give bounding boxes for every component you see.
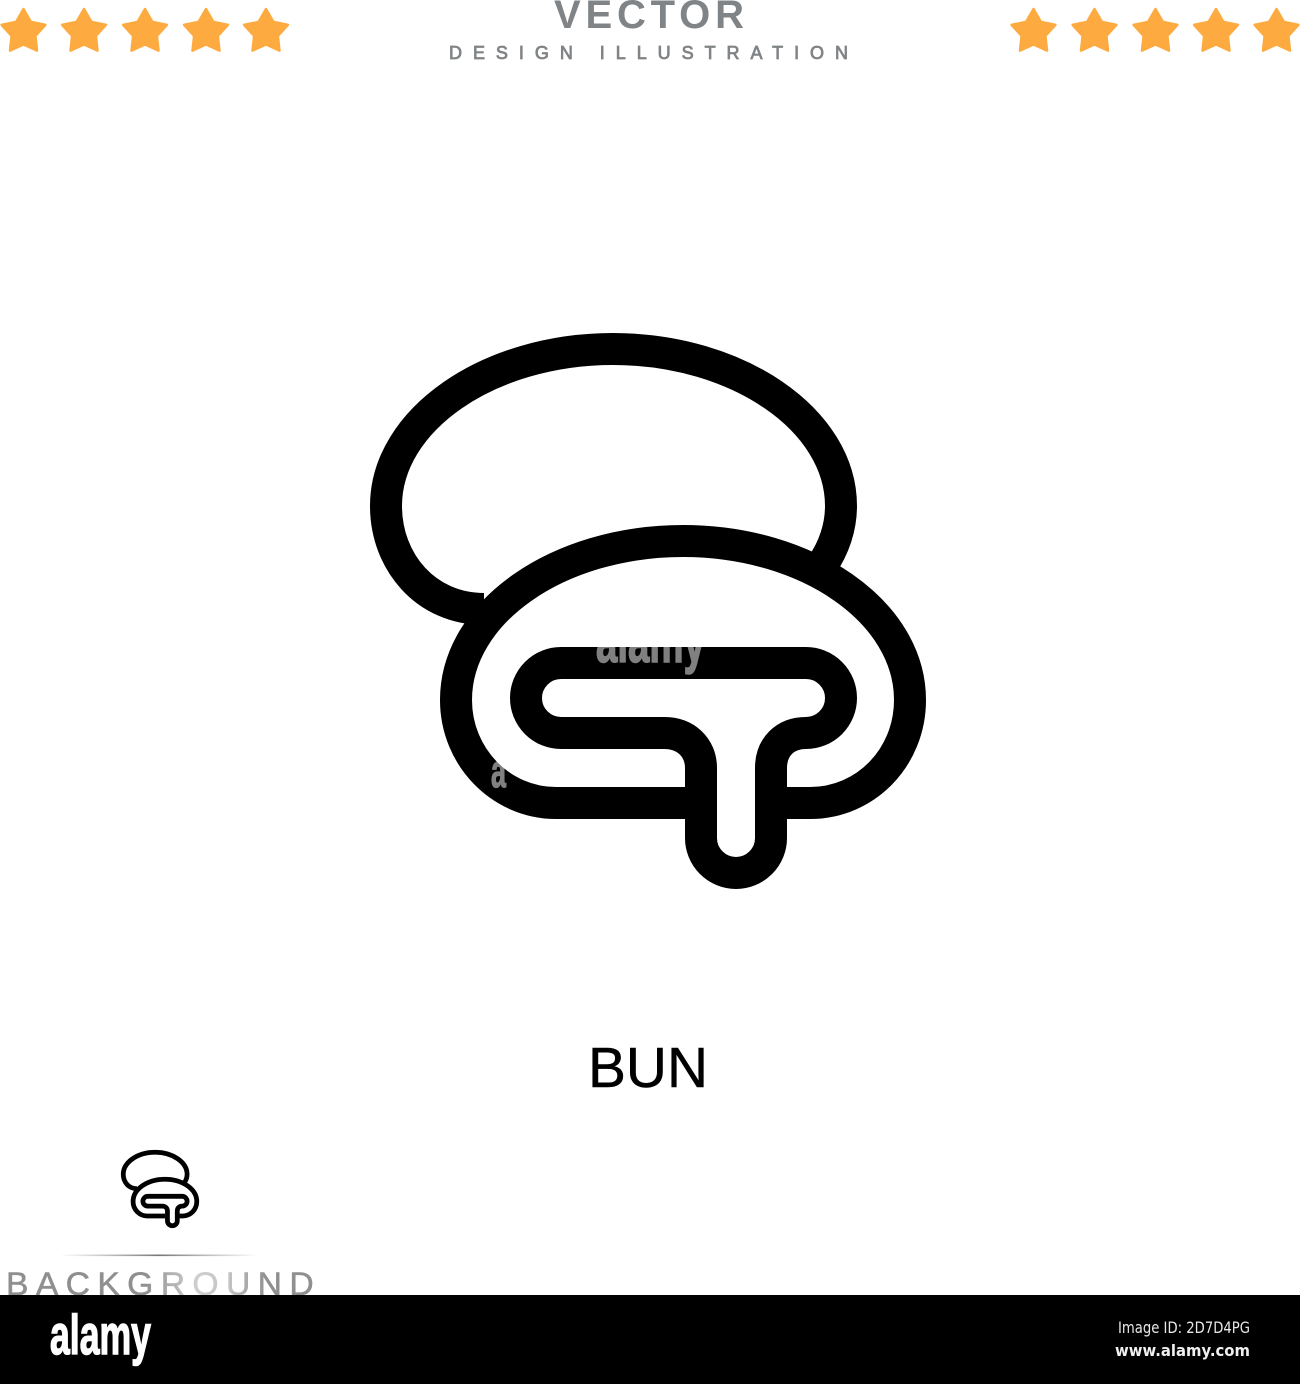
footer bar — [0, 1295, 1300, 1384]
subheading: DESIGN ILLUSTRATION: DESIGN ILLUSTRATION — [449, 43, 848, 63]
icon: bun (small) — [123, 1152, 197, 1226]
bottom bun half — [456, 541, 910, 803]
footer website: www.alamy.com — [1115, 1341, 1250, 1360]
rating stars: left — [2, 9, 288, 51]
top bun half — [386, 349, 841, 609]
rating stars: right — [1012, 9, 1298, 51]
footer image id: Image ID: 2D7D4PG — [1118, 1318, 1250, 1337]
label: BACKGROUND: BACKGROUND — [6, 1266, 321, 1302]
label: BUN: BUN — [588, 1036, 708, 1100]
icon: bun (large) — [386, 349, 910, 873]
watermark: alamy over icon: alamy — [596, 610, 705, 675]
filling — [526, 663, 841, 873]
watermark: letter a over icon: a — [491, 745, 506, 797]
footer logo: alamy: alamy — [50, 1303, 151, 1366]
